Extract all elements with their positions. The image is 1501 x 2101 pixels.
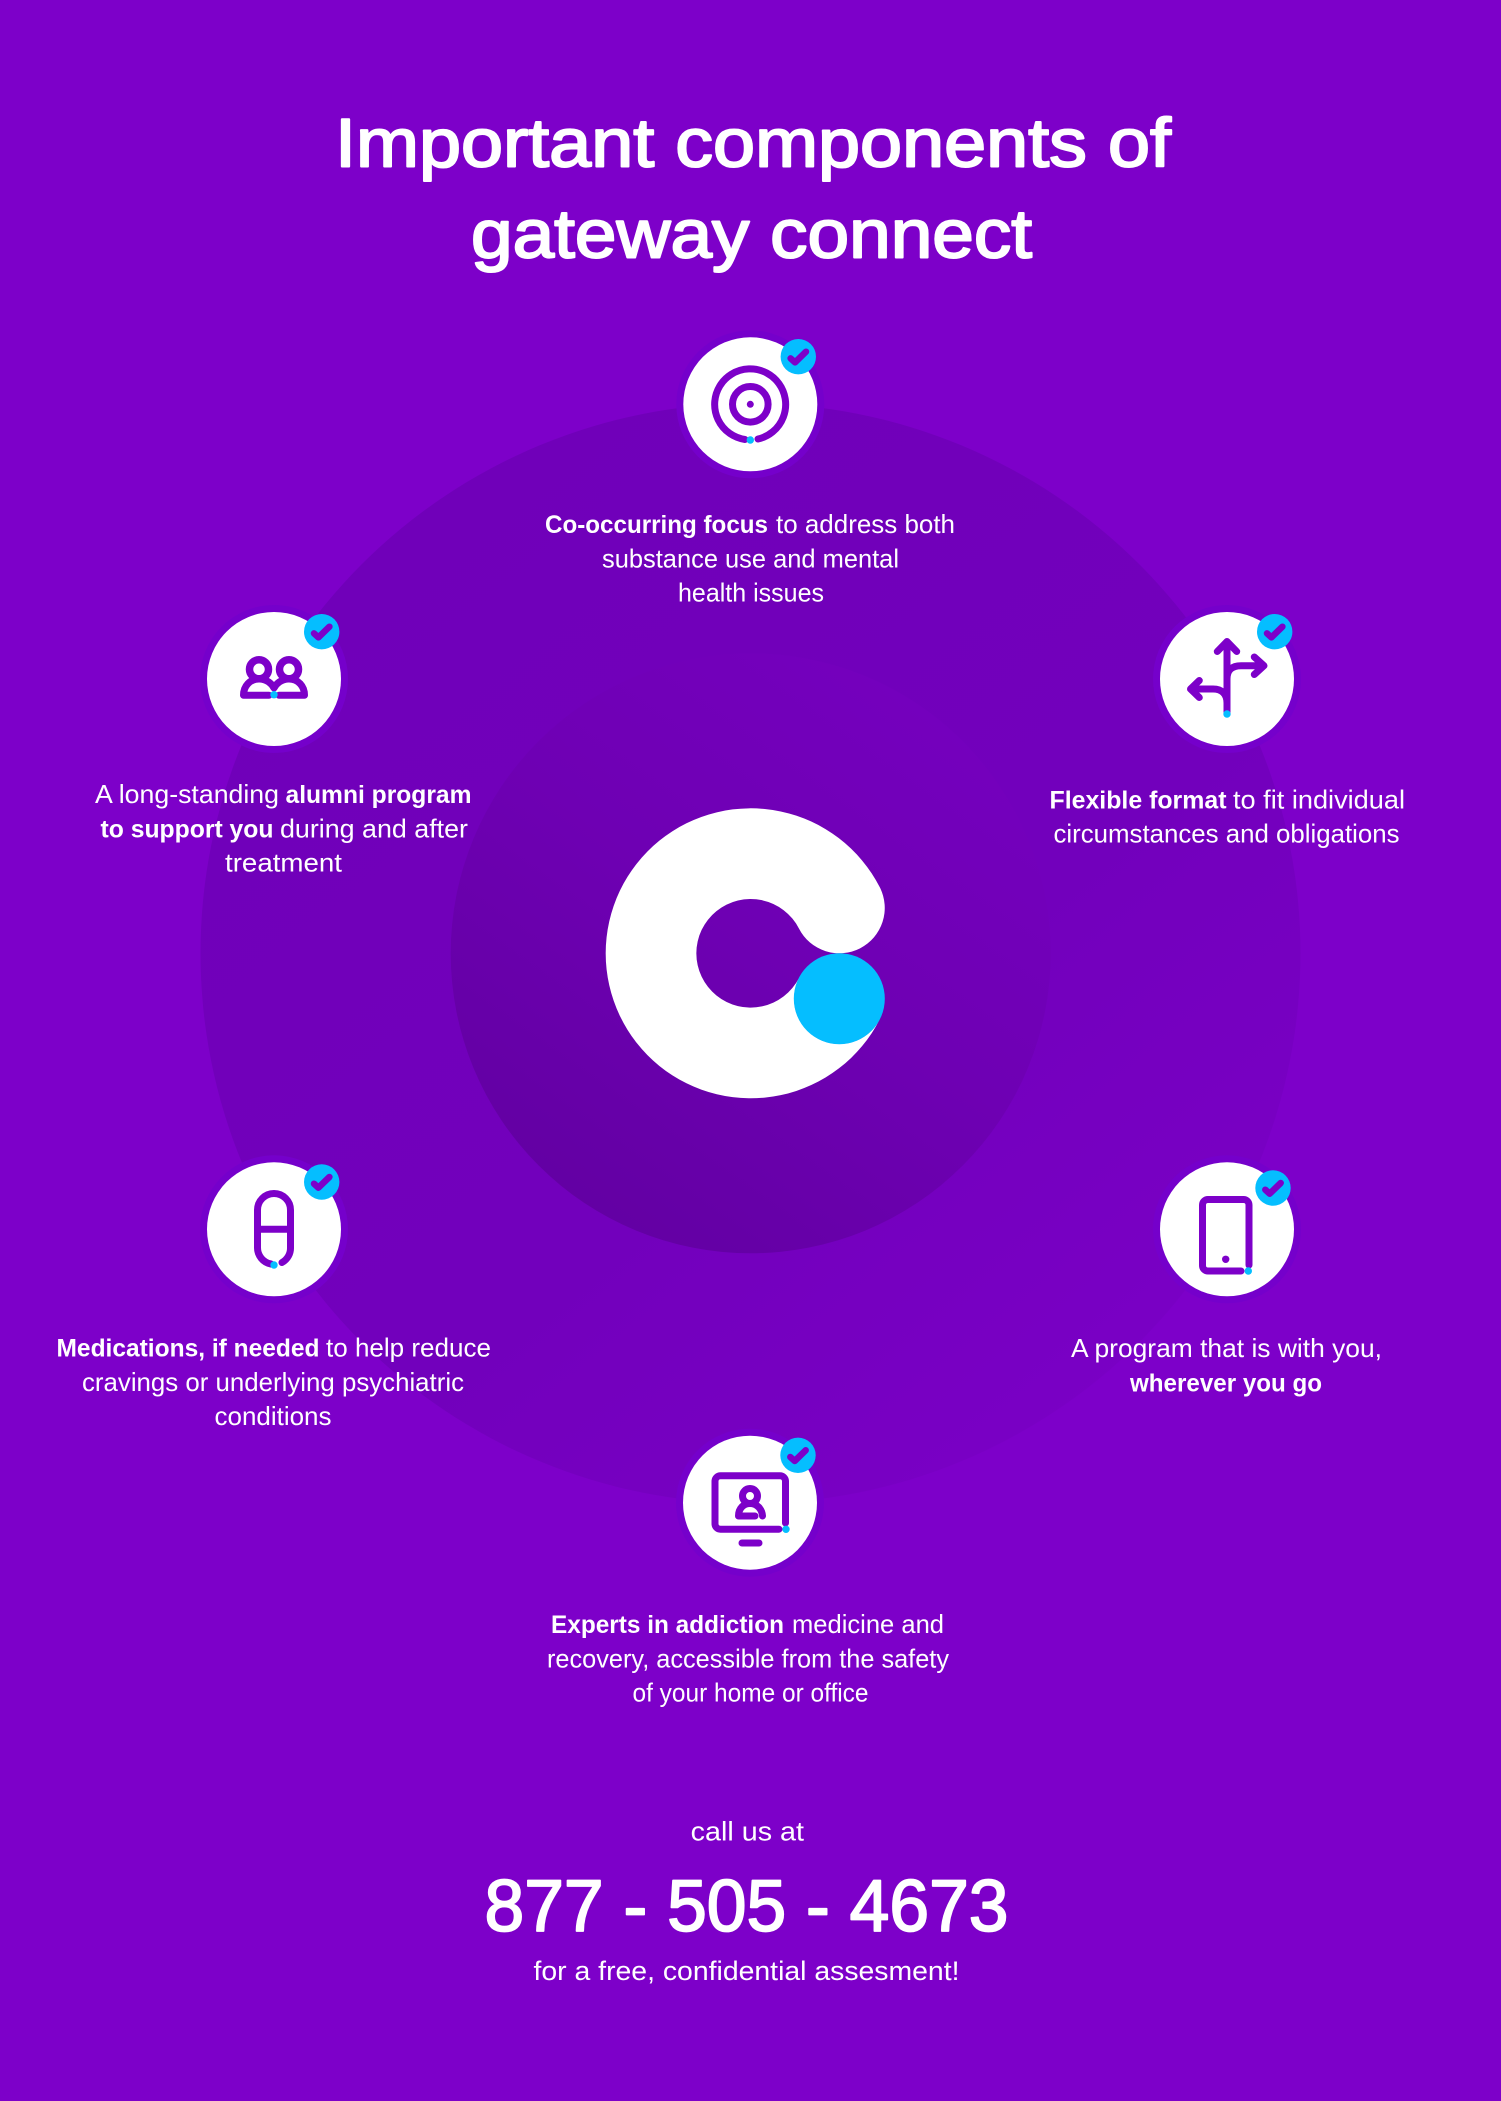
text: alumni program: to support you [100,816,274,844]
icon: monitor with person [676,1429,824,1577]
text: free assessment: for a free, confidential assesment! [534,1956,960,1986]
text: co-occurring focus [545,509,955,608]
title: Important components of [335,104,1172,182]
text: wherever you go [1071,1333,1382,1398]
icon: target [676,330,824,478]
icon: phone [1153,1155,1301,1303]
text: medications: conditions [214,1401,332,1431]
text: flexible format: to fit individual [1233,784,1405,814]
item: wherever you go [1071,1155,1382,1398]
text: alumni program: treatment [225,848,343,878]
text: alumni program: during and after [280,814,468,844]
title: gateway connect [471,196,1032,272]
text: experts in addiction: Experts in addiction [551,1611,784,1639]
text: alumni program: alumni program [286,781,472,809]
text: co-occurring focus: Co-occurring focus [545,511,768,539]
phone number: 877 - 505 - 4673 [484,1866,1008,1947]
item: alumni program [95,605,472,878]
text: medications: to help reduce [326,1332,491,1362]
text: flexible format: circumstances and obligations [1054,818,1400,848]
inner background disk [451,653,1051,1253]
text: experts in addiction: of your home or office [632,1678,868,1708]
text: co-occurring focus: to address both [776,509,955,539]
text: co-occurring focus: health issues [678,578,824,608]
item: co-occurring focus [545,330,955,608]
outer background disk [200,403,1300,1503]
title [335,104,1172,272]
text: flexible format: Flexible format [1050,786,1227,814]
text: alumni program [95,779,472,878]
text: experts in addiction [547,1609,949,1708]
icon: capsule [200,1155,348,1303]
text: medications: Medications, if needed [56,1334,320,1362]
text: wherever you go: wherever you go [1129,1370,1322,1398]
icon: branching arrows [1153,605,1301,753]
text: flexible format [1050,784,1405,848]
item: flexible format [1050,605,1405,848]
text: call us at: call us at [691,1817,805,1847]
text: experts in addiction: medicine and [792,1609,944,1639]
text: medications: cravings or underlying psychiatric [82,1367,464,1397]
footer call to action [484,1817,1008,1986]
text: co-occurring focus: substance use and mental [602,544,899,574]
text: wherever you go: A program that is with you, [1071,1333,1382,1363]
center logo [606,808,885,1098]
icon: people [200,605,348,753]
text: experts in addiction: recovery, accessible from the safety [547,1644,949,1674]
text: alumni program: A long-standing [95,779,279,809]
item: experts in addiction [547,1429,949,1708]
text: medications [56,1332,491,1431]
item: medications [56,1155,491,1431]
